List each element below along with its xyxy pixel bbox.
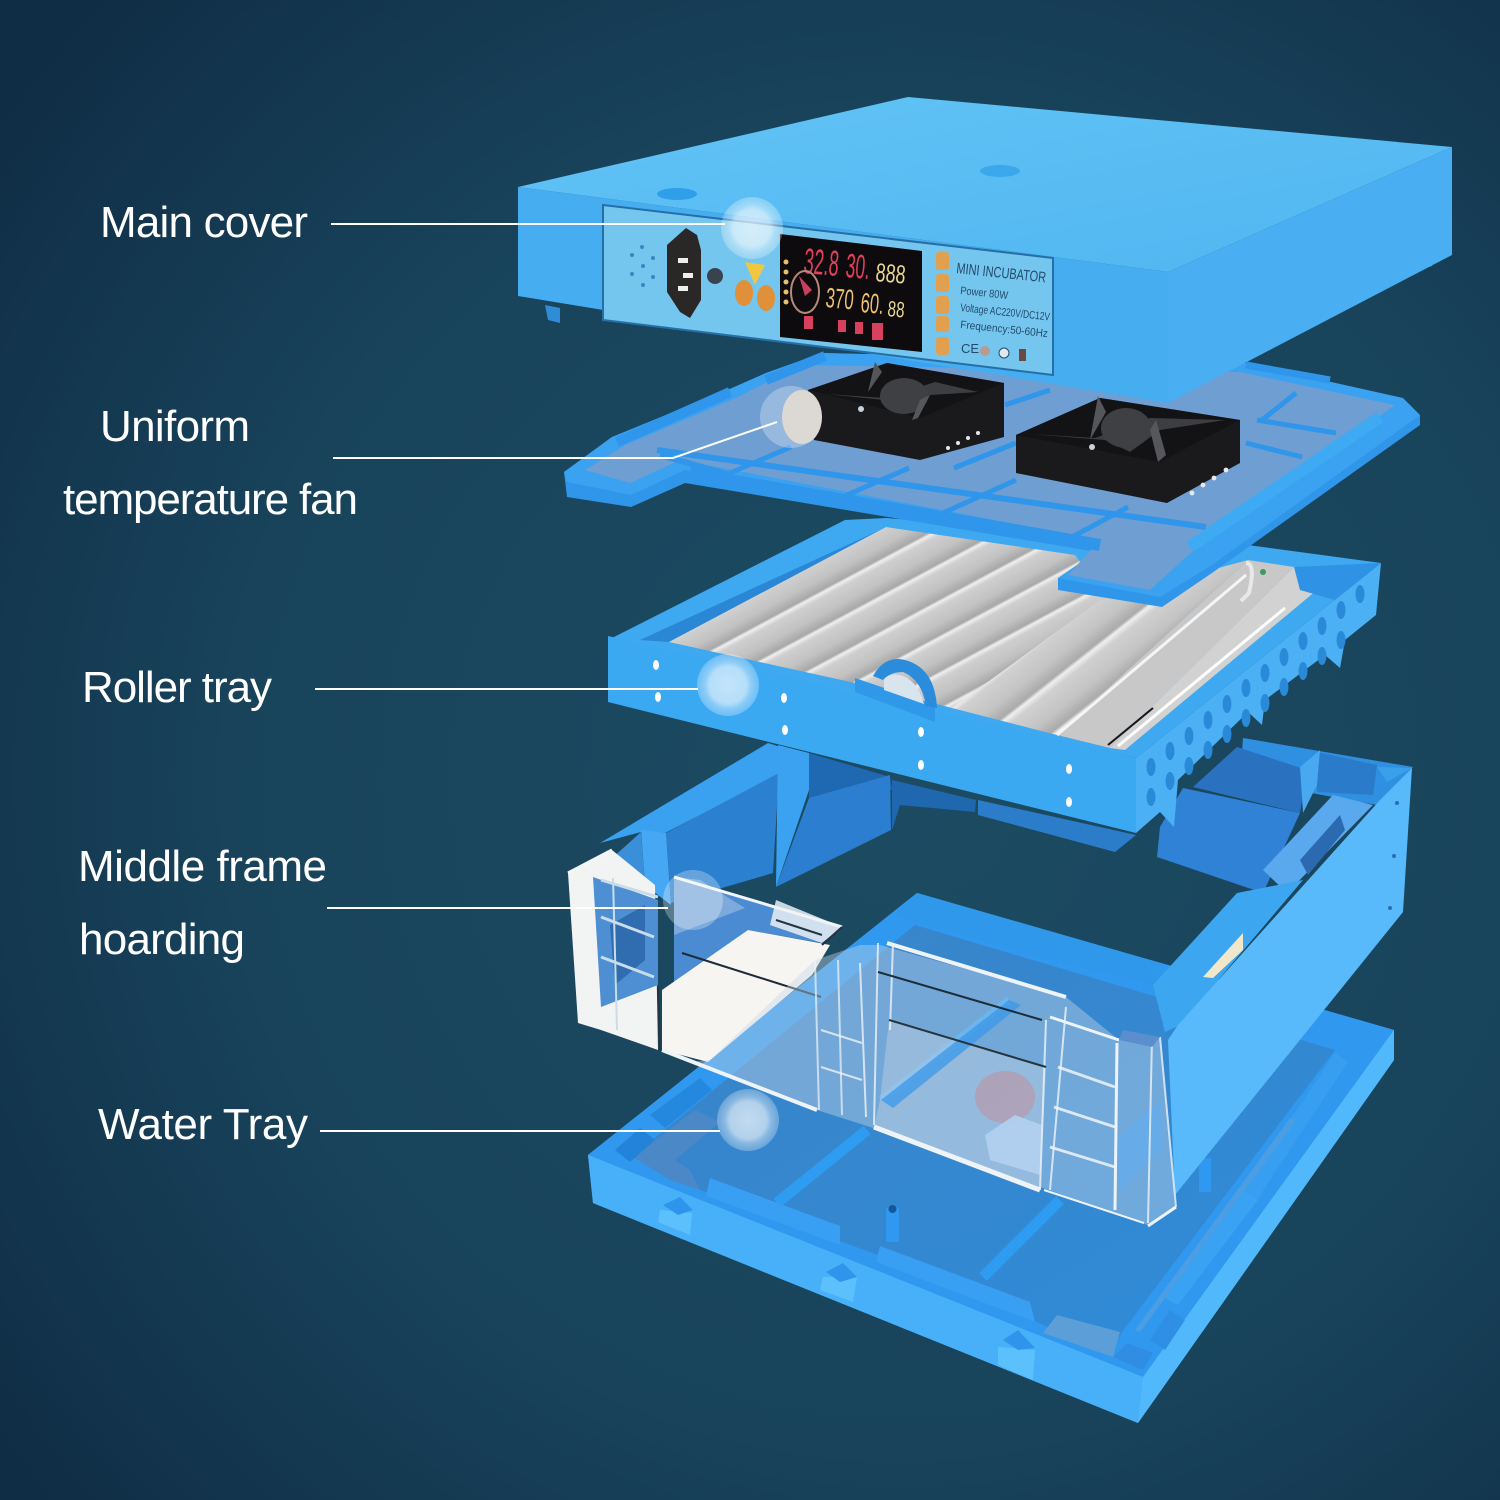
display: 30. (844, 247, 872, 287)
nameplate text: Voltage AC220V/DC12V (960, 302, 1051, 323)
label: Water Tray: Water Tray (98, 1100, 308, 1149)
nameplate text: CE (961, 341, 979, 356)
label: Roller tray: Roller tray (82, 663, 272, 712)
display: 88 (887, 296, 906, 322)
right rear block (1157, 738, 1413, 893)
fan 2 (1016, 396, 1240, 503)
nameplate text (956, 260, 1051, 361)
right inner wall (1294, 563, 1381, 600)
label: Uniform temperature fan (63, 386, 822, 524)
nameplate text: Power 80W (960, 285, 1009, 302)
fan 1 pins (946, 431, 980, 450)
power socket (667, 228, 701, 318)
center rear block (776, 745, 1136, 887)
label: Middle frame hoarding (78, 842, 723, 964)
logo (735, 262, 775, 311)
tray back rim (895, 893, 1160, 985)
rollers (669, 527, 1335, 750)
water tray (588, 893, 1394, 1423)
nameplate text: MINI INCUBATOR (956, 260, 1047, 286)
clear panel left with white floor (568, 850, 842, 1062)
tray pillars (886, 1158, 1211, 1242)
tray top rim (608, 518, 1381, 758)
tray floor (640, 925, 1335, 1350)
roller tray (608, 518, 1381, 833)
middle frame hoarding (568, 738, 1413, 1226)
display (780, 234, 922, 352)
uniform temperature fan tray (564, 353, 1420, 607)
display: 32.8 (802, 240, 841, 284)
display: 60. (859, 287, 885, 320)
tray clips (658, 1197, 1035, 1380)
label: Main cover: Main cover (100, 198, 308, 247)
white pins (653, 660, 1072, 807)
display: 888 (874, 257, 907, 290)
label: Roller tray (82, 654, 759, 716)
control panel (603, 205, 1053, 375)
label: Water Tray (98, 1089, 779, 1151)
clear panel right (662, 943, 1176, 1226)
main cover (518, 97, 1452, 403)
fan 2 pins (1190, 468, 1228, 495)
fan 1 (808, 362, 1004, 460)
display: 370 (824, 282, 855, 315)
side holes (1146, 585, 1364, 806)
label: Uniform temperature fan: temperature fan (63, 475, 358, 524)
tray raised bars (615, 1053, 1348, 1370)
speaker holes (630, 245, 655, 287)
label: Middle frame hoarding: hoarding (79, 915, 245, 964)
tray ribs (617, 356, 1380, 547)
buttons (936, 252, 949, 355)
tray floor ribs (777, 1000, 1060, 1277)
label: Main cover (100, 197, 783, 259)
label: Middle frame hoarding: Middle frame (78, 842, 327, 891)
left rear block (600, 743, 790, 960)
right wall (1153, 768, 1412, 1195)
DC socket (707, 268, 723, 284)
label: Uniform temperature fan: Uniform (100, 402, 250, 451)
tray faces (608, 636, 1136, 833)
tray floor (585, 365, 1395, 590)
handle (855, 659, 937, 722)
nameplate text: Frequency:50-60Hz (960, 319, 1048, 340)
